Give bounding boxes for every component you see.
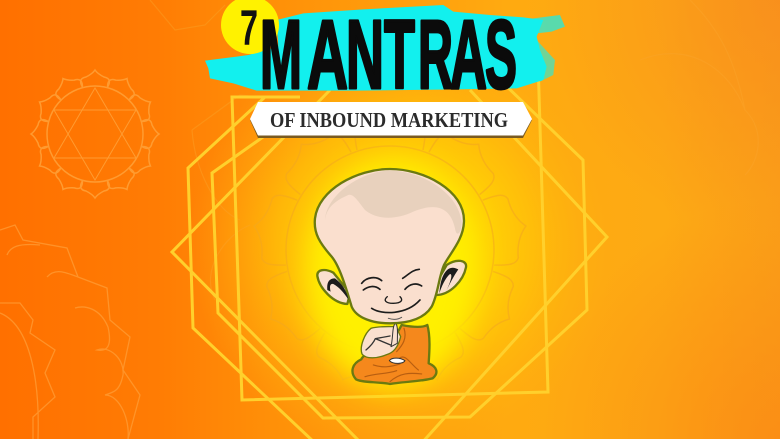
banner plate — [250, 102, 532, 136]
mouth — [372, 300, 420, 313]
lower hand — [389, 358, 405, 363]
left eye — [362, 278, 382, 290]
monk illustration — [315, 169, 466, 384]
title: MANTRAS: A — [450, 0, 487, 109]
text: S — [485, 0, 517, 109]
monk halo — [308, 163, 476, 387]
nose — [385, 297, 402, 303]
left arm — [361, 327, 401, 358]
subtitle text: OF INBOUND MARKETING — [270, 108, 508, 132]
title brush stroke — [205, 5, 565, 91]
ear right — [436, 261, 466, 295]
ear left — [317, 270, 350, 304]
banner shadow — [250, 120, 532, 138]
title: MANTRAS: A — [307, 0, 348, 109]
chin — [388, 317, 402, 319]
robe folds — [365, 328, 422, 382]
number 7: 7 — [240, 0, 258, 56]
head shading — [325, 171, 462, 234]
yellow circle — [221, 0, 279, 54]
mandala: centre lotus — [248, 112, 532, 392]
title: MANTRAS: T — [384, 0, 415, 109]
title: MANTRAS: N — [346, 0, 384, 109]
head — [315, 169, 464, 323]
title: MANTRAS — [260, 0, 517, 109]
mandala: bottom left — [0, 225, 140, 439]
title: MANTRAS: M — [260, 0, 302, 109]
frame: rotated square — [172, 90, 607, 439]
ear shadows — [327, 268, 458, 300]
raised finger — [391, 323, 397, 347]
subtitle banner — [250, 102, 532, 138]
frame: inner octagon — [212, 80, 587, 418]
gold sacred geometry frames — [172, 60, 607, 439]
frame: outer octagon — [188, 97, 315, 439]
title: MANTRAS: R — [418, 0, 453, 109]
arm detail — [366, 336, 391, 350]
mandala: top left — [31, 70, 159, 198]
frame: square — [232, 60, 548, 400]
number badge — [221, 0, 279, 56]
legs and robe — [352, 325, 436, 384]
right eye — [403, 269, 422, 289]
mandala: faint outer lotus — [150, 0, 758, 300]
